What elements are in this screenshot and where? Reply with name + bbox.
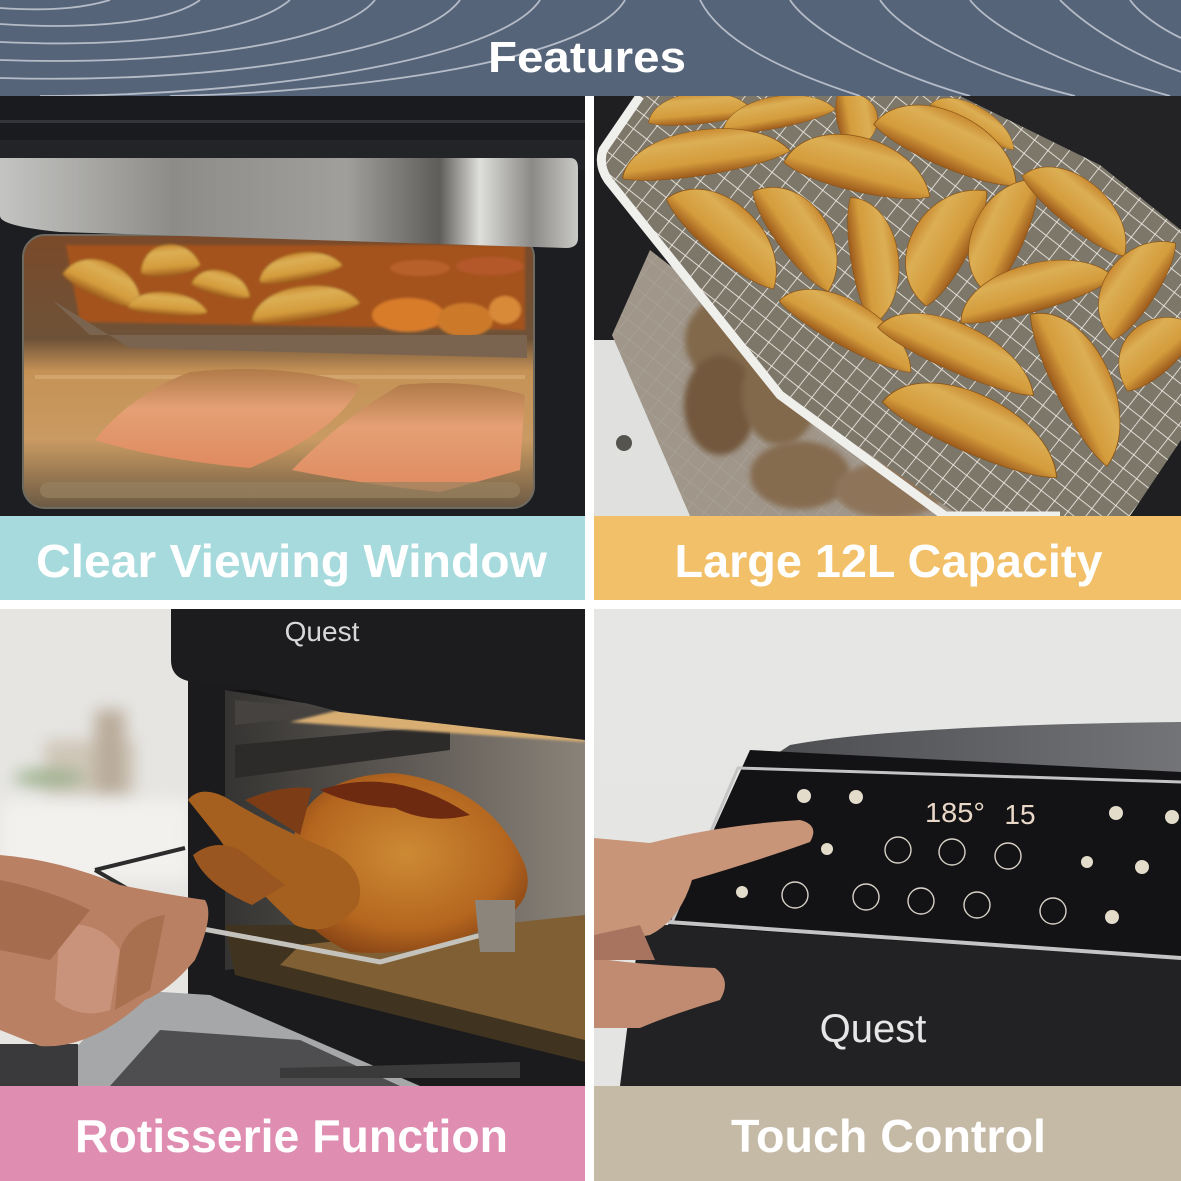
contour line pattern — [0, 0, 1181, 96]
tray — [601, 96, 1181, 516]
control panel — [668, 750, 1181, 960]
photo: touch control panel: 15 — [1004, 799, 1036, 830]
logo: Quest — [285, 616, 360, 647]
rack — [52, 300, 527, 358]
photo: wedges on mesh tray — [594, 84, 1181, 518]
label: rotisserie function — [0, 1086, 585, 1181]
label: touch control — [594, 1086, 1181, 1181]
door — [78, 992, 420, 1086]
panel: touch control — [594, 609, 1181, 1181]
lid — [780, 722, 1181, 772]
touch icons — [782, 837, 1066, 924]
label: rotisserie function: Rotisserie Function — [75, 1110, 508, 1162]
glass window — [23, 235, 534, 508]
label: clear viewing window: Clear Viewing Window — [36, 535, 547, 587]
blurred kitchen background — [0, 710, 190, 880]
oven top — [171, 609, 585, 740]
upper food — [60, 242, 525, 337]
display readout: 185° — [925, 797, 985, 828]
label: large capacity — [594, 516, 1181, 600]
photo: touch control panel — [594, 609, 1181, 1086]
hand — [0, 855, 208, 1046]
lower basket — [612, 250, 990, 516]
chicken — [188, 773, 528, 953]
panel: rotisserie function — [0, 609, 585, 1181]
brand logo: Quest — [820, 1007, 926, 1051]
label: touch control: Touch Control — [731, 1110, 1046, 1162]
label: large capacity: Large 12L Capacity — [674, 535, 1103, 587]
photo: rotisserie chicken — [0, 609, 585, 1086]
wedges — [617, 84, 1181, 492]
rotisserie rack — [205, 927, 479, 964]
oven interior — [225, 690, 585, 970]
panel: clear viewing window — [0, 96, 585, 600]
panel: large 12L capacity — [594, 84, 1181, 600]
heading: Features — [488, 33, 686, 82]
photo: oven window — [0, 96, 585, 516]
oven body — [188, 675, 585, 1086]
lower body — [620, 925, 1181, 1086]
header banner — [0, 0, 1181, 96]
fingers — [594, 820, 813, 945]
label: clear viewing window — [0, 516, 585, 600]
steel handle — [0, 158, 578, 248]
salmon fillets — [95, 369, 360, 468]
